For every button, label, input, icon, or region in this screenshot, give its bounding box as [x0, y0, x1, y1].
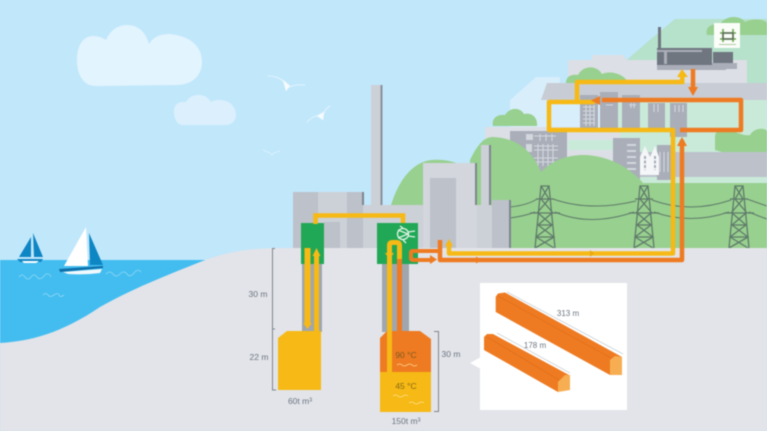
- beam: 313 m: 313 m: [557, 309, 579, 318]
- beam: 178 m: [484, 333, 570, 392]
- icon: white storage tanks: [640, 146, 659, 175]
- cloud: small: [174, 95, 236, 125]
- left storage tank: [278, 331, 321, 390]
- arrows: orange: [430, 87, 698, 264]
- left shaft: [278, 223, 324, 390]
- dimension labels: 30 m: [249, 289, 267, 299]
- upper hillside: [485, 17, 767, 183]
- boat: small: [17, 233, 43, 263]
- temperature labels: 45 °C: [395, 381, 417, 391]
- orange well pipe: [397, 258, 402, 335]
- dimension labels: 150t m³: [392, 416, 421, 426]
- panel: cavern detail: [470, 283, 627, 410]
- dimension labels: 22 m: [250, 352, 268, 362]
- left green unit: [301, 223, 324, 264]
- cloud: large: [77, 25, 202, 86]
- icon: turbine: [398, 226, 415, 243]
- bush: right: [715, 128, 767, 152]
- green hills: [385, 137, 767, 250]
- surface yellow pipe: [449, 82, 683, 254]
- sea: [0, 260, 210, 350]
- right green unit: [377, 223, 418, 264]
- hillside plant: [657, 27, 737, 70]
- power lines: [510, 199, 767, 220]
- yellow well pipe: [390, 242, 400, 373]
- right storage tank: [380, 331, 431, 372]
- beam: 313 m: [496, 292, 623, 375]
- bush: top: [566, 67, 628, 83]
- dimension labels: [249, 289, 460, 426]
- beam: 178 m: 178 m: [524, 341, 546, 350]
- orange outlet pipe: [411, 251, 440, 260]
- temperature labels: 90 °C: [395, 350, 417, 360]
- factory buildings on hillside: [510, 92, 687, 182]
- arrow: yellow up: [677, 69, 688, 84]
- power plant: [293, 85, 511, 248]
- dimension labels: 60t m³: [288, 396, 312, 406]
- bush behind logo: [707, 17, 767, 35]
- ground: [0, 248, 767, 431]
- dimension labels: 30 m: [442, 349, 460, 359]
- temperature labels: [393, 350, 424, 404]
- waves: [19, 270, 141, 296]
- icon: pylon 3: [724, 186, 754, 248]
- logo badge: [714, 23, 740, 48]
- bush: left: [493, 109, 537, 126]
- surface orange pipe: [440, 69, 741, 260]
- right shaft: [377, 223, 431, 412]
- boat: large: [59, 227, 103, 274]
- connecting pipe between units: [316, 216, 403, 225]
- icon: birds: [263, 76, 330, 155]
- icon: pylon 1: [530, 186, 560, 248]
- dimension brackets: [272, 248, 438, 412]
- icon: pylon 2: [629, 186, 659, 248]
